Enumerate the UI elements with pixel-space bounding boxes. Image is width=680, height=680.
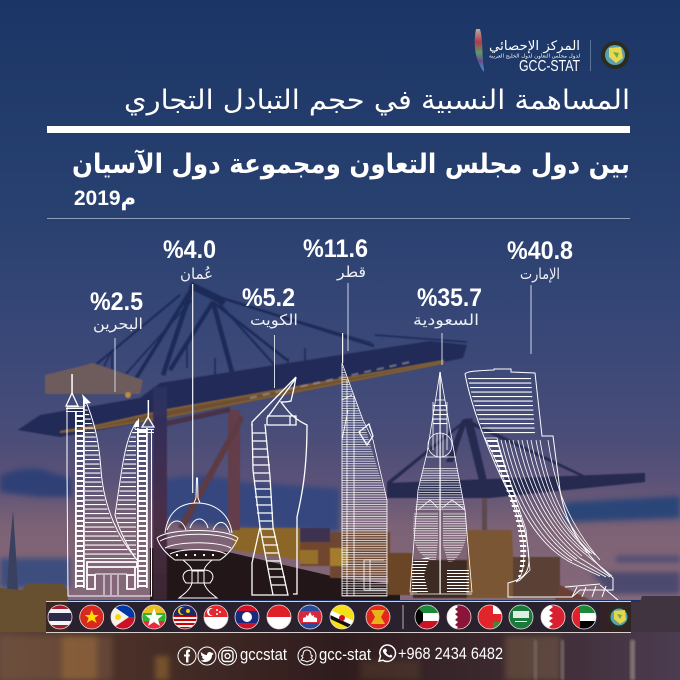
water <box>0 632 680 680</box>
flag: Bahrain <box>540 604 565 630</box>
label: Oman: عُمان <box>180 265 213 283</box>
handle: gccstat: gccstat <box>240 645 287 664</box>
phone number: +968 2434 6482 <box>398 644 503 663</box>
label: Oman <box>163 236 216 493</box>
label: Saudi: السعودية <box>413 311 479 329</box>
flag: Cambodia <box>298 605 322 629</box>
title line 1: المساهمة النسبية في حجم التبادل التجاري <box>124 85 630 116</box>
logo: GCC-STAT <box>475 29 629 75</box>
flag: GCC <box>607 605 631 629</box>
flag: Brunei <box>330 604 354 630</box>
label: Saudi <box>413 284 482 365</box>
label: Qatar: قطر <box>336 263 366 281</box>
flag: Saudi Arabia <box>509 605 533 629</box>
flag: Qatar <box>446 604 471 630</box>
label: Bahrain <box>90 288 143 392</box>
flag: Kuwait <box>414 604 439 630</box>
footer contacts <box>178 644 503 665</box>
flag: Oman <box>478 605 502 629</box>
building: UAE Capital Gate <box>465 369 618 600</box>
label: UAE: الإمارت <box>520 265 560 283</box>
label: Saudi: %35.7 <box>417 284 482 312</box>
label: Kuwait <box>242 284 298 388</box>
flag: Laos <box>235 605 259 629</box>
icon: twitter <box>198 647 216 665</box>
flag: Vietnam <box>80 605 104 629</box>
label: Bahrain: البحرين <box>93 315 143 333</box>
ship hull <box>150 548 400 600</box>
title rule <box>47 126 630 133</box>
building: Qatar tower <box>342 333 387 596</box>
label: Qatar <box>303 235 368 351</box>
clouds <box>0 468 680 594</box>
label: Qatar: %11.6 <box>303 235 368 263</box>
containers <box>233 528 413 595</box>
flag: Indonesia <box>267 605 291 629</box>
logo: GCC-STAT: المركز الإحصائي <box>489 39 580 54</box>
icon: ribbon <box>475 29 484 72</box>
logo: GCC-STAT: لدول مجلس التعاون لدول الخليج العربية <box>489 54 581 60</box>
label: Oman: %4.0 <box>163 236 216 264</box>
building: Kuwait tower <box>252 377 307 595</box>
label: UAE <box>507 237 573 354</box>
title line 2: بين دول مجلس التعاون ومجموعة دول الآسيان <box>72 149 630 180</box>
main crane <box>18 285 467 600</box>
icon: instagram <box>218 647 236 665</box>
icon: whatsapp <box>379 645 396 662</box>
label: Kuwait: %5.2 <box>242 284 295 312</box>
skyline right <box>600 596 680 632</box>
label: Kuwait: الكويت <box>250 311 298 329</box>
flag band <box>46 601 631 633</box>
flag: ASEAN <box>366 605 390 629</box>
label: Bahrain: %2.5 <box>90 288 143 316</box>
icon: facebook <box>178 647 196 665</box>
flag: Myanmar <box>142 605 166 629</box>
flag: Singapore <box>204 605 228 629</box>
building: Saudi Kingdom Centre <box>410 372 472 594</box>
handle: gcc-stat: gcc-stat <box>319 645 371 664</box>
icon: GCC crest <box>601 41 629 69</box>
label: UAE: %40.8 <box>507 237 573 265</box>
flag: Malaysia <box>173 605 197 629</box>
ship superstructure <box>413 530 590 600</box>
logo: GCC-STAT: GCC-STAT <box>519 58 580 75</box>
flag: Thailand <box>48 605 72 629</box>
far crane <box>387 418 645 530</box>
yard left <box>0 583 68 632</box>
building: Bahrain WTC <box>66 374 154 596</box>
icon: snapchat <box>298 647 316 665</box>
far tower <box>7 510 18 590</box>
building: Oman incense burner <box>157 478 238 598</box>
flag: UAE <box>572 605 596 629</box>
flag: Philippines <box>110 604 135 630</box>
year: م2019 <box>74 187 136 210</box>
